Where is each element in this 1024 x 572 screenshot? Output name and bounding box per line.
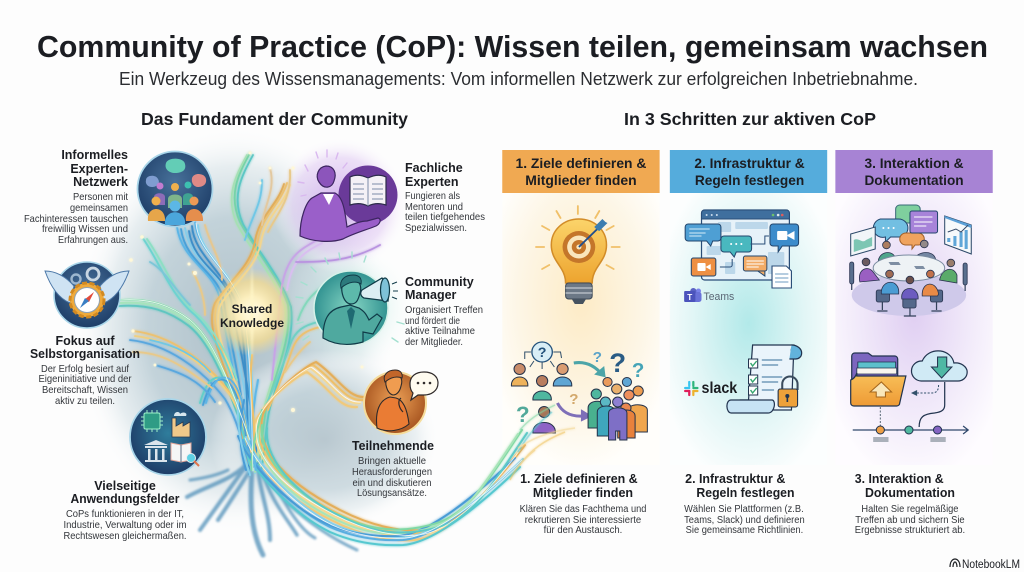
label: Bringen aktuelle xyxy=(358,455,426,467)
step 3 background xyxy=(835,193,993,465)
step 1 text: Mitglieder finden xyxy=(533,485,633,500)
icon: thinking participant xyxy=(364,370,438,434)
label: Bereitschaft, Wissen xyxy=(42,384,128,396)
label xyxy=(24,148,128,246)
label xyxy=(64,479,187,542)
step 2 header: Regeln festlegen xyxy=(695,173,804,188)
label: Informelles xyxy=(61,148,128,162)
label: Erfahrungen aus. xyxy=(58,234,128,246)
icon: people and brains xyxy=(138,152,212,226)
label: Experten xyxy=(405,175,458,189)
label: Experten- xyxy=(70,162,128,176)
label: Lösungsansätze. xyxy=(357,487,427,499)
icon: team meeting around a table xyxy=(850,205,971,316)
label: Eigeninitiative und der xyxy=(38,373,132,385)
panel: step 3 xyxy=(835,150,993,536)
label: Fachinteressen tauschen xyxy=(24,213,128,225)
step 1 text: 1. Ziele definieren & xyxy=(520,471,638,486)
label: Spezialwissen. xyxy=(405,222,467,234)
label: Fungieren als xyxy=(405,190,460,202)
step 3 text: Dokumentation xyxy=(865,485,955,500)
label: gemeinsamen xyxy=(70,202,128,214)
heading: right section: In 3 Schritten zur aktiven CoP xyxy=(624,109,876,129)
step 3 header: Dokumentation xyxy=(864,173,964,188)
step 2 text: Wählen Sie Plattformen (z.B. xyxy=(684,503,804,515)
icon: light bulb with target xyxy=(536,206,620,304)
label: Selbstorganisation xyxy=(30,347,140,361)
label: Fachliche xyxy=(405,161,463,175)
step 3 text xyxy=(855,471,965,536)
label: und fördert die xyxy=(405,315,460,327)
title: Community of Practice (CoP): Wissen teilen, gemeinsam wachsen xyxy=(37,29,988,64)
node: Vielseitige Anwendungsfelder xyxy=(64,399,206,542)
step 2 text: Teams, Slack) und definieren xyxy=(684,514,805,526)
label: Organisiert Treffen xyxy=(405,304,483,316)
icon: expert with open book xyxy=(298,150,398,241)
panel: step 2 xyxy=(670,150,827,536)
label: ein und diskutieren xyxy=(352,477,432,489)
panels: three steps xyxy=(502,150,993,536)
icon: people with questions: ? xyxy=(632,360,644,382)
node: Informelles Experten-Netzwerk xyxy=(24,148,212,246)
step 1 header xyxy=(502,150,660,193)
panel: step 1 xyxy=(502,150,660,536)
label: Industrie, Verwaltung oder im xyxy=(64,519,187,531)
step 1 text: rekrutieren Sie interessierte xyxy=(525,514,641,526)
Shared Knowledge label: Knowledge xyxy=(220,316,284,330)
step 2 text xyxy=(684,471,805,536)
step 2 header xyxy=(670,150,827,193)
step 3 text: Ergebnisse strukturiert ab. xyxy=(855,524,965,536)
label: Vielseitige xyxy=(94,479,156,493)
icon: people with questions xyxy=(511,342,647,440)
roots xyxy=(187,460,357,555)
icon: people with questions: ? xyxy=(609,347,626,378)
icon: people with questions: ? xyxy=(516,402,530,427)
label: Herausforderungen xyxy=(352,466,432,478)
step 2 text: Regeln festlegen xyxy=(696,485,794,500)
step 2 header: 2. Infrastruktur & xyxy=(694,156,805,171)
step 3 header xyxy=(835,150,993,193)
step 1 text: Klären Sie das Fachthema und xyxy=(520,503,646,515)
icon: manager with megaphone xyxy=(296,252,404,345)
label: Netzwerk xyxy=(73,175,128,189)
knowledge tree illustration xyxy=(75,125,527,555)
step 1 text xyxy=(520,471,646,536)
node: Fokus auf Selbstorganisation xyxy=(30,262,140,407)
node: Teilnehmende xyxy=(352,370,438,499)
logo: Teams: T xyxy=(687,293,692,302)
central glow xyxy=(210,268,294,356)
step 1 header: 1. Ziele definieren & xyxy=(516,156,646,171)
label: Teilnehmende xyxy=(352,439,434,453)
branches xyxy=(119,153,527,545)
label: Manager xyxy=(405,288,457,302)
step 2 text: Sie gemeinsame Richtlinien. xyxy=(686,524,803,536)
step 3 text: Halten Sie regelmäßige xyxy=(861,503,959,515)
logo: Teams: Teams xyxy=(704,291,735,303)
node: Community Manager xyxy=(296,252,483,348)
step 2 text: 2. Infrastruktur & xyxy=(685,471,786,486)
node: Fachliche Experten xyxy=(298,150,485,241)
icon: rule scroll with padlock xyxy=(727,345,802,413)
icon: chip, factory, institution, book xyxy=(130,399,206,475)
step 1 background xyxy=(502,193,660,465)
icon: people with questions: ? xyxy=(593,349,602,366)
step 1 text: für den Austausch. xyxy=(544,524,622,536)
label xyxy=(405,275,483,348)
label: der Mitglieder. xyxy=(405,336,463,348)
label: Rechtswesen gleichermaßen. xyxy=(64,530,186,542)
logo: Teams xyxy=(684,288,735,303)
label: Community xyxy=(405,275,474,289)
step 2 background xyxy=(670,193,827,465)
tree strands reaching into step 1 xyxy=(510,405,575,480)
logo: Slack xyxy=(685,379,737,397)
label xyxy=(405,161,485,234)
label: Personen mit xyxy=(73,191,128,203)
step 3 text: Treffen ab und sichern Sie xyxy=(855,514,965,526)
label xyxy=(30,334,140,407)
Shared Knowledge label: Shared xyxy=(232,302,272,316)
icon: folder and cloud timeline xyxy=(851,351,968,442)
logo: Slack: slack xyxy=(702,379,737,397)
label: CoPs funktionieren in der IT, xyxy=(66,508,184,520)
step 1 header: Mitglieder finden xyxy=(525,173,637,188)
icon: people with questions: ? xyxy=(538,344,546,360)
icon: people with questions: ? xyxy=(569,391,578,408)
label: aktive Teilnahme xyxy=(405,325,475,337)
heading: left section: Das Fundament der Community xyxy=(141,109,408,129)
icon: winged gear compass xyxy=(45,262,129,328)
subtitle: Ein Werkzeug des Wissensmanagements: Vom informellen Netzwerk zur erfolgreichen Inbetriebnahme. xyxy=(119,69,918,89)
label xyxy=(352,439,434,499)
label: freiwillig Wissen und xyxy=(42,223,128,235)
label: Anwendungsfelder xyxy=(70,492,180,506)
label: Der Erfolg besiert auf xyxy=(41,363,129,375)
icon: collaboration window xyxy=(685,210,799,288)
step 3 text: 3. Interaktion & xyxy=(855,471,944,486)
label: Mentoren und xyxy=(405,201,463,213)
label: Fokus auf xyxy=(55,334,115,348)
label: teilen tiefgehendes xyxy=(405,211,485,223)
step 3 header: 3. Interaktion & xyxy=(864,156,964,171)
label: aktiv zu teilen. xyxy=(55,395,115,407)
